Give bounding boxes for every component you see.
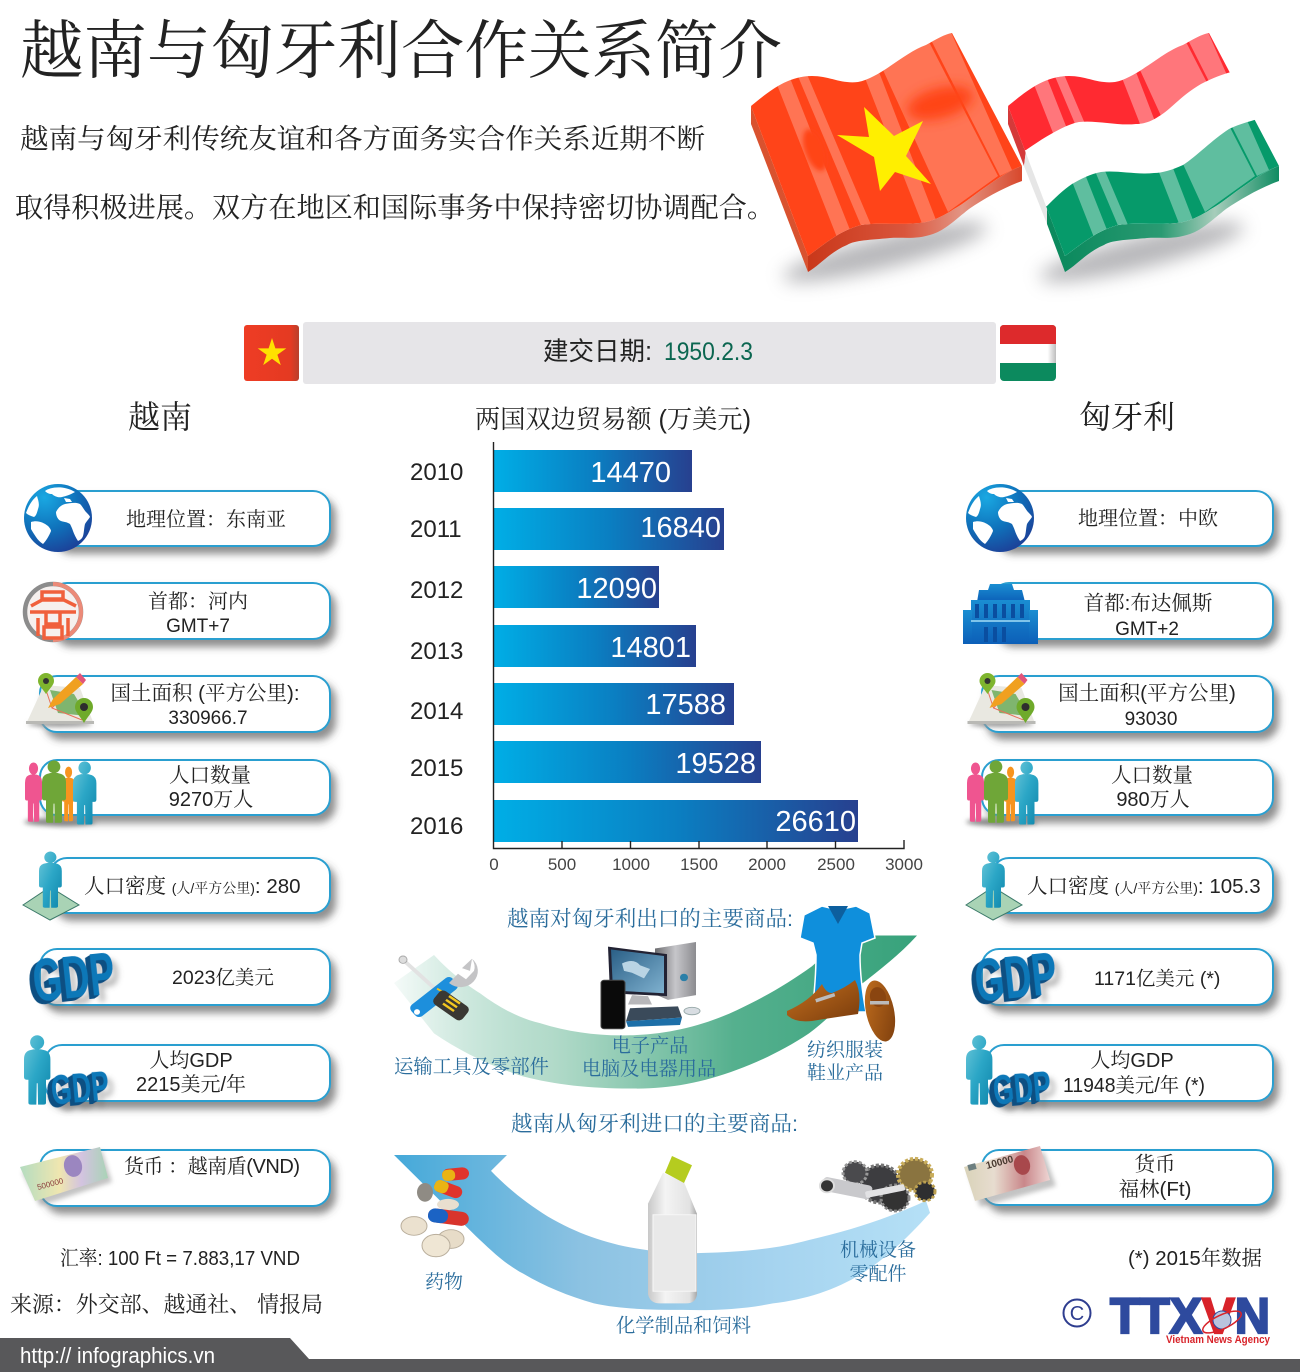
icon: globe <box>966 484 1034 552</box>
import heading: 越南从匈牙利进口的主要商品: <box>511 1112 798 1136</box>
card <box>50 491 330 546</box>
intro text: 越南与匈牙利传统友谊和各方面务实合作关系近期不断 <box>20 123 705 154</box>
label: machinery: 机械设备 <box>840 1239 916 1261</box>
bar chart: bilateral trade: 500 <box>548 855 576 874</box>
bar chart: bilateral trade: 17588 <box>645 689 726 721</box>
card <box>982 1150 1273 1205</box>
text <box>136 1049 246 1096</box>
small flag: Hungary <box>1000 325 1056 381</box>
panel: Vietnam population <box>24 760 330 826</box>
bar chart: bilateral trade: 2013 <box>410 638 463 665</box>
bar chart: bilateral trade: 26610 <box>775 806 856 838</box>
text: 11948美元/年 (*) <box>1063 1074 1205 1097</box>
text: 93030 <box>1125 709 1177 730</box>
card <box>992 858 1273 913</box>
arrow: imports <box>394 1155 930 1310</box>
panel: Hungary location <box>966 484 1273 552</box>
text: 福林(Ft) <box>1119 1178 1191 1201</box>
text <box>1084 592 1212 640</box>
icon: person and GDP <box>966 1035 1053 1113</box>
intro text: 取得积极进展。双方在地区和国际事务中保持密切协调配合。 <box>15 192 775 223</box>
heading: Hungary: 匈牙利 <box>1079 399 1175 435</box>
chart title: 两国双边贸易额 (万美元) <box>475 406 751 434</box>
source note: 来源：外交部、越通社、 情报局 <box>10 1292 323 1317</box>
label: textiles and footwear: 纺织服装 <box>807 1039 883 1061</box>
label: chemicals and feed: 化学制品和饲料 <box>616 1315 751 1337</box>
bar chart: bilateral trade: 3000 <box>885 855 923 874</box>
icon: Hanoi gate <box>25 584 81 640</box>
card <box>982 949 1273 1005</box>
import section <box>394 1112 935 1337</box>
icon: dong banknote <box>20 1147 112 1206</box>
title: 越南与匈牙利合作关系简介 <box>20 15 782 87</box>
icon: person and GDP: GDP <box>991 1062 1053 1113</box>
bar chart: bilateral trade: 2015 <box>410 755 463 782</box>
text <box>1119 1153 1191 1201</box>
panel: Vietnam currency <box>20 1147 330 1206</box>
icon: forint banknote: 10000 <box>985 1154 1015 1172</box>
label: electronics: 电子产品 <box>612 1035 688 1057</box>
panel: Vietnam location <box>24 484 330 552</box>
text <box>148 590 248 637</box>
icon: person and GDP: GDP <box>49 1062 111 1113</box>
text: 首都:布达佩斯 <box>1084 592 1212 615</box>
icon: tools <box>399 956 478 1022</box>
bar chart: bilateral trade: 2016 <box>410 813 463 840</box>
card <box>40 676 330 732</box>
card <box>45 1045 330 1101</box>
text: 货币 <box>1134 1153 1176 1176</box>
date panel <box>244 322 1056 384</box>
bar chart: bilateral trade: 14470 <box>590 457 671 489</box>
text: 人口数量 <box>1111 764 1193 787</box>
card <box>992 491 1273 546</box>
bar chart: bilateral trade: 16840 <box>640 512 721 544</box>
bar chart: bilateral trade: 0 <box>489 855 499 874</box>
bar chart: bilateral trade: 2500 <box>817 855 855 874</box>
card <box>992 583 1273 639</box>
text: 地理位置：中欧 <box>1078 507 1218 530</box>
label: electronics: 电脑及电器用品 <box>582 1058 716 1080</box>
text: 货币 ：越南盾(VND) <box>124 1155 300 1178</box>
logo: TTXVN: Vietnam News Agency <box>1166 1334 1271 1346</box>
panel: Vietnam capital <box>25 583 330 640</box>
icon: shirt <box>800 906 875 1012</box>
text <box>1058 682 1236 730</box>
panel: Vietnam GDP <box>29 939 330 1015</box>
bar chart: bilateral trade: 2000 <box>748 855 786 874</box>
copyright mark: C <box>1070 1303 1084 1325</box>
text: 地理位置：东南亚 <box>126 508 286 531</box>
text: 国土面积 (平方公里): <box>110 682 300 705</box>
bar chart: bilateral trade: 2012 <box>410 577 463 604</box>
bar chart: bilateral trade: 1500 <box>680 855 718 874</box>
grey bar <box>303 322 996 384</box>
text: GMT+2 <box>1115 619 1179 640</box>
card <box>987 1045 1273 1101</box>
icon: Budapest building <box>963 584 1038 644</box>
panel: Hungary population <box>966 760 1273 826</box>
panel: Hungary density <box>966 852 1273 920</box>
icon: globe <box>24 484 92 552</box>
panel: Vietnam area <box>26 673 330 732</box>
bar chart: bilateral trade: 2010 <box>410 459 463 486</box>
label: electronics <box>582 1035 716 1080</box>
label: textiles and footwear: 鞋业产品 <box>807 1062 883 1084</box>
icon: Vietnam 3D flag <box>751 33 1022 292</box>
icon: person and GDP <box>24 1035 111 1113</box>
panel: Hungary GDP per capita <box>966 1035 1273 1113</box>
date label: 建交日期: <box>543 338 652 366</box>
card <box>40 1150 330 1206</box>
icon: map and pencil <box>26 673 94 727</box>
bar chart: bilateral trade: 19528 <box>675 748 756 780</box>
text: 人口数量 <box>169 764 251 787</box>
icon: dong banknote: 500000 <box>36 1176 65 1192</box>
arrow: exports <box>394 935 917 1089</box>
label: machinery: 零配件 <box>849 1263 907 1285</box>
icon: GDP: GDP <box>29 939 118 1015</box>
card <box>50 583 330 639</box>
icon: bottle <box>648 1156 697 1303</box>
intro text <box>15 123 775 223</box>
bar chart: bilateral trade: 14801 <box>610 632 691 664</box>
logo: TTXVN: TTXVN <box>1110 1288 1270 1344</box>
text <box>110 682 300 729</box>
label: textiles and footwear <box>807 1039 883 1084</box>
text: 人均GDP <box>149 1049 233 1072</box>
label: medicine: 药物 <box>425 1271 463 1293</box>
text: 1171亿美元 (*) <box>1094 968 1220 990</box>
bar chart: bilateral trade: 12090 <box>576 573 657 605</box>
data year note: (*) 2015年数据 <box>1128 1247 1262 1270</box>
export section <box>394 906 917 1089</box>
icon: shoes <box>787 978 900 1044</box>
bar chart: bilateral trade: 1000 <box>612 855 650 874</box>
text: 2215美元/年 <box>136 1073 246 1096</box>
small flag: Vietnam <box>244 325 299 381</box>
bar chart: bilateral trade <box>410 406 923 874</box>
panel: Vietnam density <box>23 852 330 920</box>
panel: Vietnam GDP per capita <box>24 1035 330 1113</box>
card <box>40 760 330 815</box>
label: machinery <box>840 1239 916 1285</box>
text: 人口密度 (人/平方公里): 280 <box>84 875 301 898</box>
icon: people <box>24 760 96 826</box>
text <box>1063 1049 1205 1097</box>
icon: map and pencil <box>968 673 1036 727</box>
date value: 1950.2.3 <box>664 338 753 366</box>
icon: people <box>966 760 1038 826</box>
card <box>982 760 1273 815</box>
text: 2023亿美元 <box>172 967 274 989</box>
card <box>50 858 330 913</box>
heading: Vietnam: 越南 <box>128 399 192 435</box>
icon: person on plot <box>23 852 79 920</box>
label: transport equipment: 运输工具及零部件 <box>394 1056 549 1078</box>
icon: Hungary 3D flag <box>1008 33 1279 292</box>
icon: machine parts <box>820 1159 935 1211</box>
text: 人口密度 (人/平方公里): 105.3 <box>1027 875 1261 898</box>
text: GMT+7 <box>166 616 230 637</box>
icon: pills <box>401 1167 470 1257</box>
text <box>1111 764 1193 811</box>
text: 人均GDP <box>1090 1049 1174 1072</box>
card <box>40 949 330 1005</box>
card <box>982 676 1273 732</box>
text <box>169 764 253 811</box>
bar chart: bilateral trade: 2014 <box>410 698 463 725</box>
exchange rate note: 汇率: 100 Ft = 7.883,17 VND <box>60 1247 300 1270</box>
footer bar <box>0 1338 1300 1372</box>
footer bar: http:// infographics.vn <box>20 1343 215 1368</box>
icon: computer and phone <box>601 942 700 1029</box>
icon: forint banknote <box>964 1146 1056 1207</box>
text: 9270万人 <box>169 788 253 811</box>
text: 国土面积(平方公里) <box>1058 682 1236 705</box>
panel: Hungary currency <box>964 1146 1273 1207</box>
panel: Hungary area <box>968 673 1273 732</box>
bar chart: bilateral trade: 2011 <box>410 516 462 543</box>
text: 首都：河内 <box>148 590 248 613</box>
text: 980万人 <box>1116 788 1190 811</box>
text: 330966.7 <box>168 708 248 729</box>
copyright mark <box>1064 1300 1090 1326</box>
export heading: 越南对匈牙利出口的主要商品: <box>507 907 793 931</box>
panel: Hungary capital <box>963 583 1273 644</box>
icon: GDP: GDP <box>971 939 1060 1015</box>
icon: person on plot <box>966 852 1022 920</box>
panel: Hungary GDP <box>971 939 1273 1015</box>
